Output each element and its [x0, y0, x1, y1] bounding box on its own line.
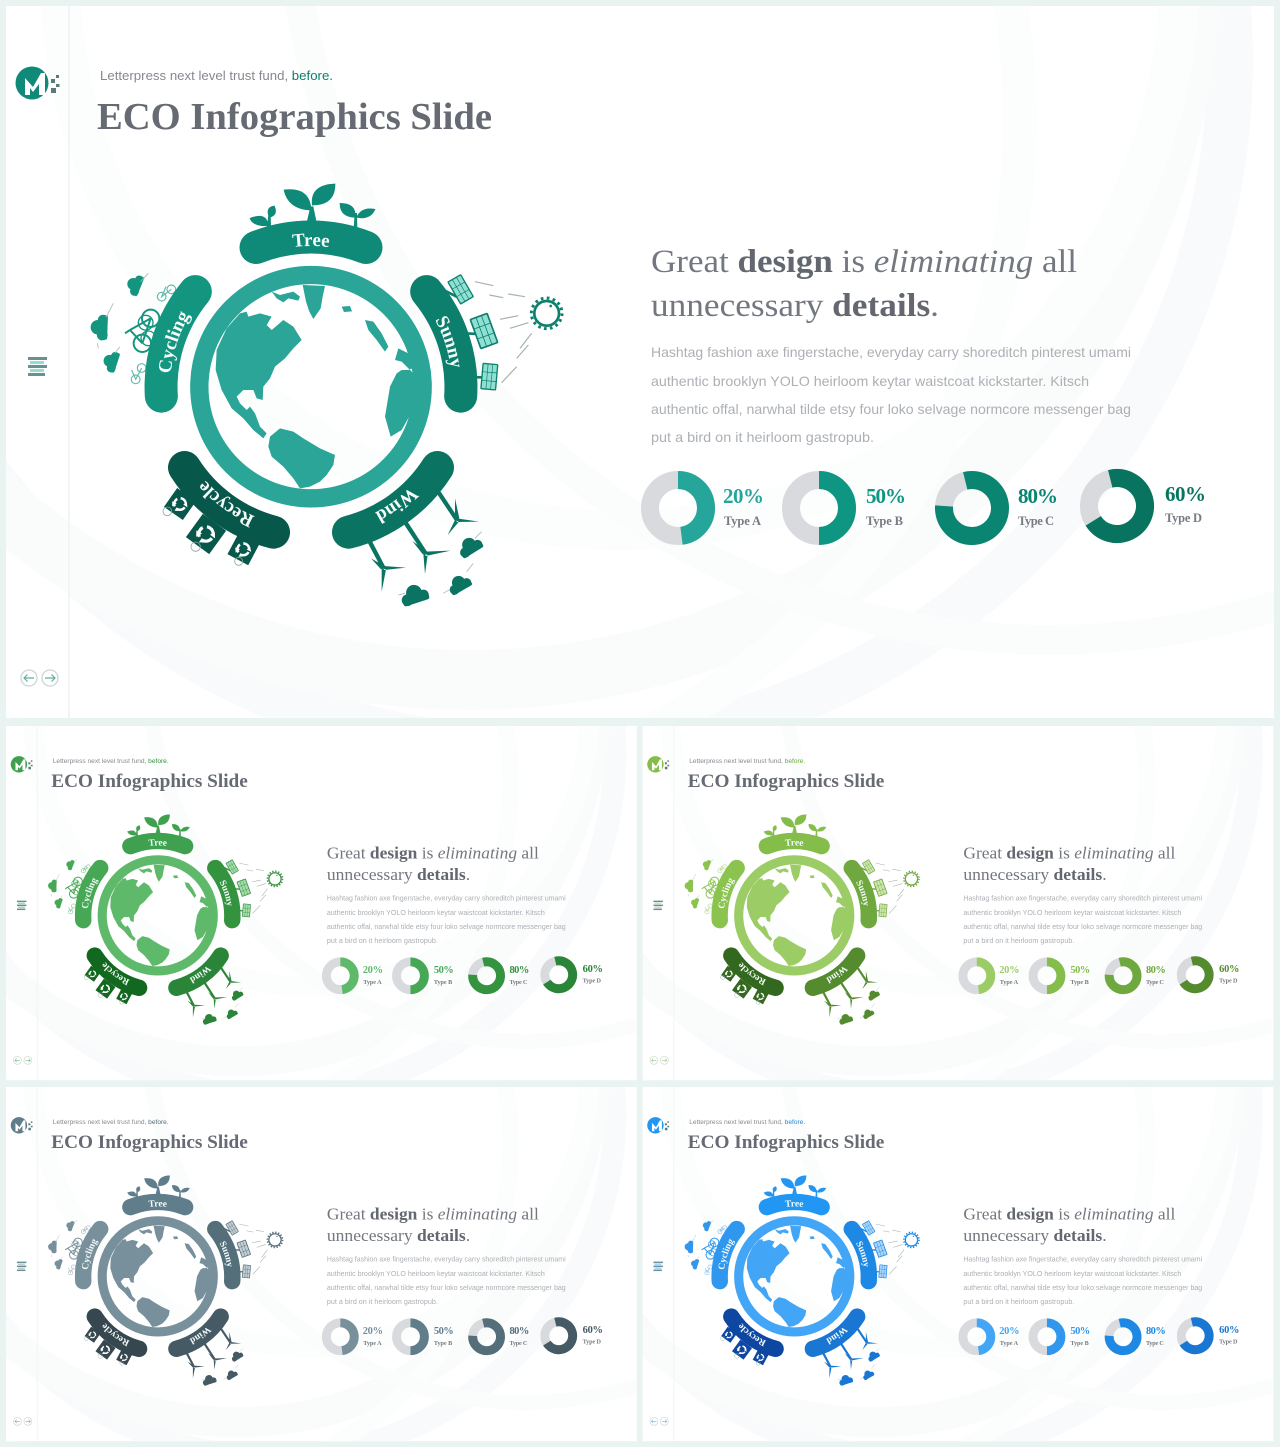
body text	[963, 896, 1203, 945]
diagram: earth with five eco bands: Cycling	[718, 878, 735, 908]
band: sunny	[410, 274, 498, 413]
body text: authentic offal, narwhal tilde etsy four loko selvage normcore messenger bag	[963, 1285, 1202, 1292]
icon: navigation arrows	[650, 1056, 668, 1064]
band: tree: Tree	[292, 234, 330, 247]
donut: Type A: Type A	[724, 514, 761, 528]
icon: navigation arrows	[21, 670, 58, 686]
diagram: earth with five eco bands	[48, 814, 284, 1025]
heading: quote: unnecessary details.	[327, 1226, 470, 1245]
body text: authentic offal, narwhal tilde etsy four loko selvage normcore messenger bag	[327, 1285, 566, 1292]
body text: Hashtag fashion axe fingerstache, everyday carry shoreditch pinterest umami	[963, 1257, 1203, 1264]
donut row: 50%	[434, 965, 454, 976]
donut row: 50%	[1070, 1326, 1090, 1337]
body text: authentic brooklyn YOLO heirloom keytar waistcoat kickstarter. Kitsch	[963, 910, 1181, 917]
donut row: Type A	[1000, 979, 1019, 986]
donut row: 80%	[509, 1326, 529, 1337]
donut row: Type B	[1070, 1340, 1089, 1347]
title: ECO Infographics Slide	[688, 771, 884, 792]
diagram: earth with five eco bands: Sunny	[856, 1241, 868, 1267]
diagram: earth with five eco bands: Tree	[784, 839, 804, 846]
icon: logo	[647, 1117, 669, 1134]
title: ECO Infographics Slide	[51, 771, 248, 792]
donut row: Type B	[1070, 979, 1089, 986]
donut: Type C: 80%	[1018, 484, 1058, 508]
heading: quote: Great design is eliminating all	[963, 1204, 1176, 1223]
body text: authentic offal, narwhal tilde etsy four loko selvage normcore messenger bag	[327, 924, 566, 931]
body text: Hashtag fashion axe fingerstache, everyday carry shoreditch pinterest umami	[651, 344, 1131, 360]
diagram: earth with five eco bands: Sunny	[220, 880, 232, 906]
diagram: earth with five eco bands: Wind	[826, 1328, 848, 1345]
band: cycling	[90, 273, 212, 413]
body text: put a bird on it heirloom gastropub.	[327, 1299, 438, 1306]
donut row	[326, 1322, 603, 1351]
donut row: 20%	[999, 1326, 1020, 1337]
diagram: earth with five eco bands	[684, 1175, 920, 1386]
donut row: 20%	[363, 1326, 383, 1337]
icon: sun with rays	[475, 282, 562, 383]
heading: quote: unnecessary details.	[327, 865, 470, 884]
diagram: earth with five eco bands: Cycling	[82, 878, 98, 908]
donut row: 20%	[363, 965, 383, 976]
body text: authentic brooklyn YOLO heirloom keytar waistcoat kickstarter. Kitsch	[327, 1271, 545, 1278]
band: wind	[332, 451, 484, 606]
donut: Type D: 60%	[1165, 482, 1206, 506]
donut: Type A	[650, 480, 764, 536]
heading: quote	[963, 1204, 1176, 1245]
panel: blue slide	[642, 1087, 1274, 1442]
panel: main teal slide	[6, 6, 1274, 718]
body text: authentic brooklyn YOLO heirloom keytar waistcoat kickstarter. Kitsch	[327, 910, 545, 917]
donut row	[963, 1322, 1240, 1351]
body text: authentic offal, narwhal tilde etsy four loko selvage normcore messenger bag	[651, 401, 1131, 417]
heading: quote: unnecessary details.	[651, 288, 939, 324]
diagram: earth with five eco bands	[90, 184, 564, 606]
band: wind: Wind	[375, 490, 420, 524]
donut row: 60%	[583, 1325, 603, 1336]
donut row: Type B	[434, 979, 452, 986]
heading: quote	[327, 843, 539, 884]
diagram: earth with five eco bands: Recycle	[102, 1323, 130, 1346]
heading: quote	[327, 1204, 539, 1245]
donut row: Type A	[1000, 1340, 1019, 1347]
heading: quote: Great design is eliminating all	[327, 1204, 539, 1223]
donut row: 60%	[1219, 1325, 1240, 1336]
subtitle: Letterpress next level trust fund, before.	[53, 758, 169, 765]
panel: slate slide	[6, 1087, 637, 1442]
donut row: 50%	[434, 1326, 454, 1337]
diagram: earth with five eco bands: Tree	[784, 1200, 804, 1207]
donut: Type C	[944, 480, 1058, 536]
diagram: earth with five eco bands: Cycling	[718, 1238, 735, 1270]
donut row: Type B	[434, 1340, 452, 1347]
body text: Hashtag fashion axe fingerstache, everyday carry shoreditch pinterest umami	[327, 896, 566, 903]
donut row	[963, 961, 1240, 990]
diagram: earth with five eco bands	[48, 1175, 284, 1386]
heading: quote: Great design is eliminating all	[963, 843, 1176, 862]
icon: globe	[199, 275, 423, 498]
body text: put a bird on it heirloom gastropub.	[327, 938, 438, 945]
subtitle: Letterpress next level trust fund, before.	[53, 1119, 169, 1126]
band: sunny: Sunny	[436, 316, 460, 368]
donut row: 50%	[1070, 965, 1090, 976]
heading: quote: unnecessary details.	[963, 865, 1107, 884]
body text: put a bird on it heirloom gastropub.	[963, 1299, 1074, 1306]
icon: menu	[17, 1262, 26, 1271]
title: ECO Infographics Slide	[51, 1132, 248, 1153]
body text: authentic brooklyn YOLO heirloom keytar waistcoat kickstarter. Kitsch	[963, 1271, 1181, 1278]
diagram: earth with five eco bands: Sunny	[220, 1241, 232, 1267]
donut row: Type D	[1219, 978, 1238, 985]
diagram: earth with five eco bands: Wind	[190, 1328, 212, 1345]
donut row	[326, 961, 603, 990]
donut: Type D	[1089, 478, 1206, 534]
icon: menu	[653, 901, 663, 910]
body text	[651, 344, 1131, 445]
donut: Type C: Type C	[1018, 514, 1054, 528]
body text: put a bird on it heirloom gastropub.	[651, 429, 874, 445]
icon: menu	[653, 1262, 663, 1271]
donut: Type B: Type B	[866, 514, 903, 528]
body text: authentic brooklyn YOLO heirloom keytar waistcoat kickstarter. Kitsch	[651, 373, 1089, 389]
body text: put a bird on it heirloom gastropub.	[963, 938, 1074, 945]
body text: Hashtag fashion axe fingerstache, everyday carry shoreditch pinterest umami	[963, 896, 1203, 903]
donut: Type D: Type D	[1165, 511, 1202, 525]
donut row: 80%	[1146, 965, 1166, 976]
icon: navigation arrows	[13, 1056, 32, 1064]
donut row: 80%	[509, 965, 529, 976]
donut row: Type C	[1146, 979, 1164, 986]
diagram: earth with five eco bands: Recycle	[102, 962, 130, 986]
donut row: 20%	[999, 965, 1020, 976]
panel: green slide	[6, 726, 637, 1080]
icon: logo	[16, 66, 60, 100]
title: ECO Infographics Slide	[97, 96, 492, 138]
icon: logo	[11, 756, 33, 773]
icon: menu	[17, 901, 26, 910]
donut row: Type C	[509, 979, 527, 986]
subtitle: Letterpress next level trust fund, before.	[689, 1119, 805, 1126]
subtitle: Letterpress next level trust fund, before.	[689, 758, 805, 765]
heading: quote	[651, 244, 1077, 324]
title: ECO Infographics Slide	[688, 1132, 884, 1153]
donut row: Type D	[583, 978, 602, 985]
icon: navigation arrows	[13, 1417, 32, 1425]
icon: logo	[647, 756, 669, 773]
band: recycle	[162, 451, 290, 566]
donut row: Type C	[1146, 1340, 1164, 1347]
donut row: 80%	[1146, 1326, 1166, 1337]
donut: Type B: 50%	[866, 484, 906, 508]
band: tree	[240, 184, 382, 264]
body text	[963, 1257, 1203, 1306]
diagram: earth with five eco bands: Cycling	[82, 1238, 98, 1270]
diagram: earth with five eco bands: Tree	[148, 839, 167, 846]
heading: quote	[963, 843, 1176, 884]
diagram: earth with five eco bands: Wind	[190, 966, 212, 984]
body text: Hashtag fashion axe fingerstache, everyday carry shoreditch pinterest umami	[327, 1257, 566, 1264]
donut: Type A: 20%	[723, 484, 764, 508]
heading: quote: unnecessary details.	[963, 1226, 1107, 1245]
heading: quote: Great design is eliminating all	[651, 244, 1077, 280]
donut row: Type C	[509, 1340, 527, 1347]
donut row: Type D	[583, 1339, 602, 1346]
donut row: 60%	[1219, 964, 1240, 975]
donut row: Type A	[363, 979, 382, 986]
subtitle: Letterpress next level trust fund, before.	[100, 68, 333, 83]
band: cycling: Cycling	[159, 311, 192, 372]
body text: authentic offal, narwhal tilde etsy four loko selvage normcore messenger bag	[963, 924, 1202, 931]
donut: Type B	[791, 480, 906, 536]
diagram: earth with five eco bands: Tree	[148, 1200, 167, 1207]
body text	[327, 1257, 566, 1306]
diagram: earth with five eco bands: Sunny	[856, 880, 868, 906]
panel: light green slide	[642, 726, 1274, 1080]
donut row: Type D	[1219, 1339, 1238, 1346]
donut row: Type A	[363, 1340, 382, 1347]
icon: menu	[28, 357, 47, 376]
donut row: 60%	[583, 964, 603, 975]
body text	[327, 896, 566, 945]
band: recycle: Recycle	[200, 481, 255, 528]
icon: navigation arrows	[650, 1417, 668, 1425]
diagram: earth with five eco bands	[684, 814, 920, 1025]
diagram: earth with five eco bands: Wind	[826, 966, 848, 984]
heading: quote: Great design is eliminating all	[327, 843, 539, 862]
diagram: earth with five eco bands: Recycle	[739, 962, 766, 986]
diagram: earth with five eco bands: Recycle	[739, 1323, 766, 1346]
icon: logo	[11, 1117, 33, 1134]
